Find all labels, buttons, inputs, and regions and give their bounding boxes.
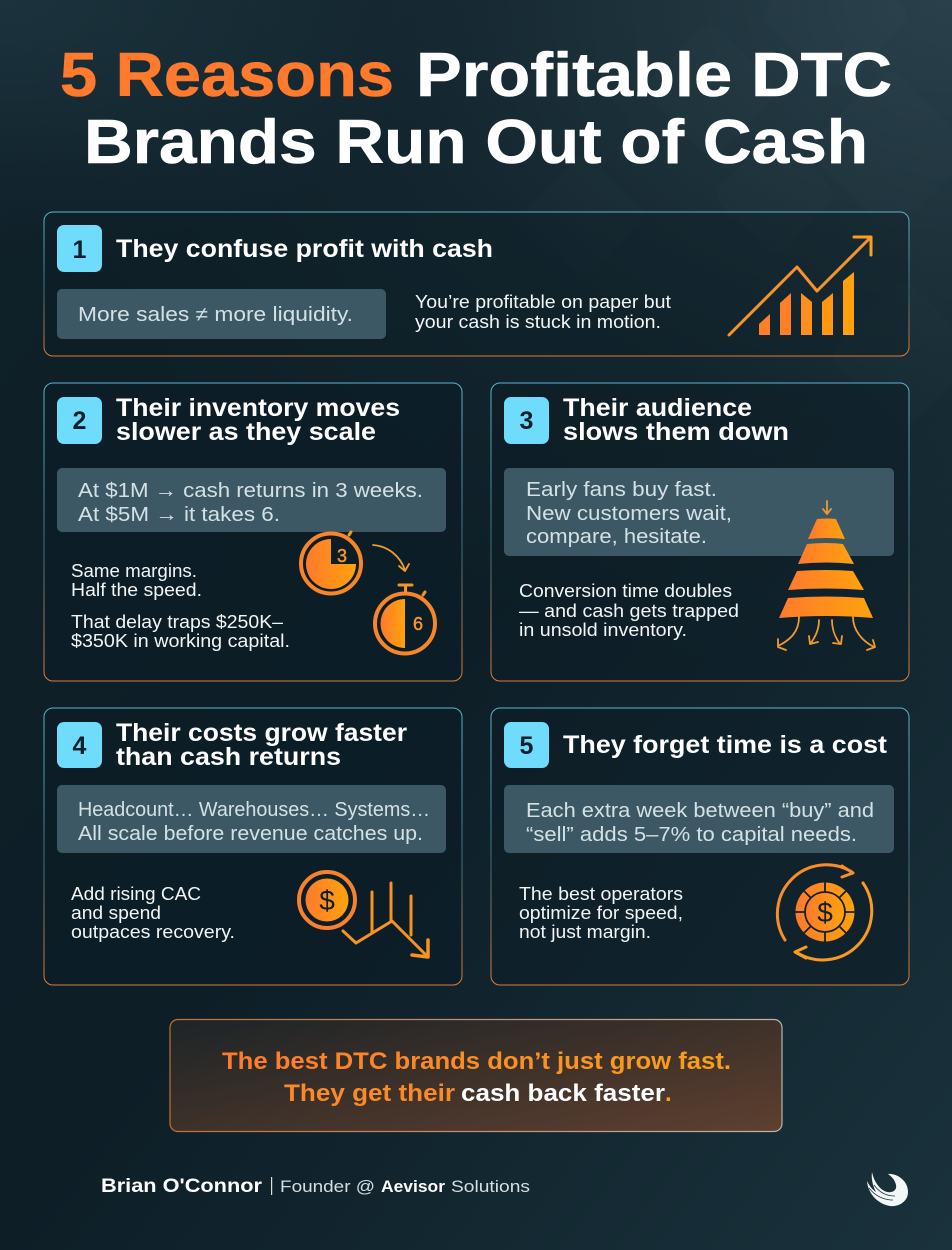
callout: closing message: They get their — [284, 1080, 455, 1107]
text block 1 — [415, 292, 671, 332]
callout 2: At $5M → it takes 6. — [78, 504, 280, 526]
title: 5 Reasons — [60, 41, 394, 110]
callout 1 — [57, 289, 386, 339]
badge 4 — [57, 722, 102, 768]
heading 1: They confuse profit with cash — [116, 235, 493, 263]
text block 3: in unsold inventory. — [519, 620, 687, 640]
text block 2: That delay traps $250K– — [71, 612, 283, 632]
icon: bird logo — [867, 1172, 908, 1206]
text block 1: your cash is stuck in motion. — [415, 312, 661, 332]
callout 4: All scale before revenue catches up. — [78, 823, 423, 845]
icon: cash cycle — [777, 865, 872, 960]
callout: closing message: cash back faster — [461, 1080, 665, 1107]
text block 4: and spend — [71, 903, 161, 923]
badge 4: 4 — [73, 732, 87, 760]
badge 1 — [57, 225, 102, 272]
text block 4: Add rising CAC — [71, 884, 201, 904]
icon: stopwatches — [301, 532, 435, 654]
heading 4: than cash returns — [116, 743, 341, 771]
text block 5: not just margin. — [519, 922, 651, 942]
panel: reason 1 — [44, 212, 909, 356]
heading 2 — [116, 394, 400, 446]
badge 5 — [504, 722, 549, 768]
badge 2 — [57, 397, 102, 444]
callout 5 — [504, 785, 894, 853]
badge 3: 3 — [520, 407, 533, 435]
callout 2 — [57, 468, 446, 532]
callout 3: New customers wait, — [526, 503, 732, 525]
title: Profitable DTC — [416, 41, 892, 110]
text block 3: Conversion time doubles — [519, 581, 732, 601]
title — [60, 41, 892, 177]
callout 3: compare, hesitate. — [526, 526, 707, 548]
text block 5: optimize for speed, — [519, 903, 683, 923]
callout 4 — [57, 785, 446, 853]
badge 2: 2 — [73, 407, 86, 435]
text block 1: You’re profitable on paper but — [415, 292, 671, 312]
footer credit: Founder @ — [280, 1177, 375, 1196]
icon: funnel — [778, 501, 875, 650]
heading 2: Their inventory moves — [116, 394, 400, 422]
panel: reason 3 — [491, 383, 909, 681]
icon: falling cash — [299, 872, 428, 957]
text block 4: outpaces recovery. — [71, 922, 235, 942]
text block 3 — [519, 581, 739, 640]
panel: reason 2 — [44, 383, 462, 681]
footer credit: Brian O'Connor — [101, 1176, 263, 1197]
badge 1: 1 — [73, 236, 87, 264]
heading 2: slower as they scale — [116, 418, 376, 446]
text block 2: $350K in working capital. — [71, 631, 290, 651]
callout: closing message: The best DTC brands don’t just grow fast. — [222, 1048, 731, 1075]
icon: rising chart — [729, 237, 871, 335]
icon: stopwatches: 3 — [337, 546, 347, 566]
heading 3: Their audience — [563, 394, 752, 422]
callout 2: At $1M → cash returns in 3 weeks. — [78, 480, 423, 502]
callout 5: Each extra week between “buy” and — [526, 800, 874, 822]
callout 4: Headcount… Warehouses… Systems… — [78, 799, 430, 821]
heading 4 — [116, 719, 407, 771]
text block 3: — and cash gets trapped — [519, 601, 739, 621]
text block 2: Half the speed. — [71, 580, 202, 600]
text block 5 — [519, 884, 683, 942]
icon: stopwatches: 6 — [413, 614, 423, 634]
heading 3 — [563, 394, 789, 446]
callout: closing message — [170, 1020, 782, 1132]
badge 3 — [504, 397, 549, 444]
text block 2: Same margins. — [71, 561, 197, 581]
text block 5: The best operators — [519, 884, 683, 904]
callout 3: Early fans buy fast. — [526, 479, 717, 501]
heading 5: They forget time is a cost — [563, 731, 888, 759]
icon: falling cash: $ — [319, 885, 335, 916]
heading 3: slows them down — [563, 418, 789, 446]
panel: reason 4 — [44, 708, 462, 985]
icon: cash cycle: $ — [817, 897, 833, 928]
callout 5: “sell” adds 5–7% to capital needs. — [526, 824, 857, 846]
footer credit: Aevisor — [381, 1177, 445, 1196]
callout 3 — [504, 468, 894, 556]
footer credit: Solutions — [451, 1177, 530, 1196]
title: Brands Run Out of Cash — [84, 108, 868, 177]
callout 1: More sales ≠ more liquidity. — [78, 304, 353, 326]
badge 5: 5 — [520, 732, 534, 760]
text block 4 — [71, 884, 235, 942]
footer credit — [101, 1176, 530, 1197]
text block 2 — [71, 561, 290, 651]
panel: reason 5 — [491, 708, 909, 985]
callout: closing message: . — [665, 1080, 672, 1107]
heading 4: Their costs grow faster — [116, 719, 407, 747]
